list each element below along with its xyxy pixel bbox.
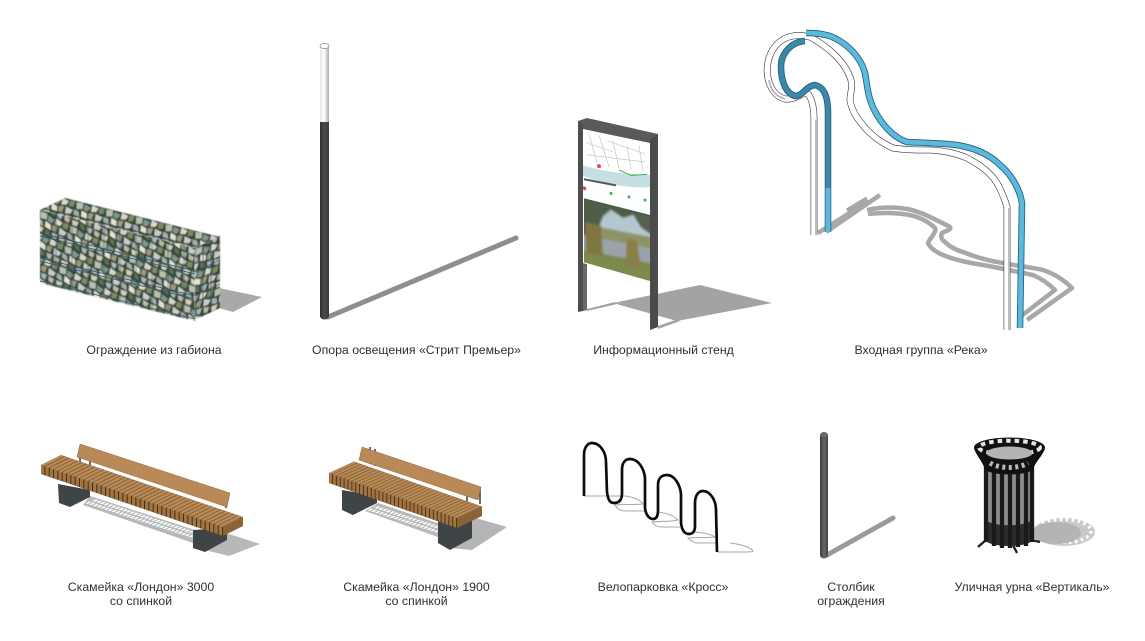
caption: Vertical street bin: Уличная урна «Вертикаль» [955, 580, 1110, 594]
icon: London bench 1900 [329, 447, 507, 550]
shadow of the arch [818, 195, 1072, 320]
icon: fence bollard [820, 432, 893, 559]
icon: Cross bike rack [584, 443, 753, 552]
caption: London bench 1900: со спинкой [385, 594, 448, 608]
caption: river entrance arch: Входная группа «Река» [854, 343, 988, 357]
caption: fence bollard: Столбик [827, 580, 875, 594]
caption: London bench 1900: Скамейка «Лондон» 1900 [343, 580, 490, 594]
caption: information stand: Информационный стенд [593, 343, 734, 357]
caption: London bench 3000: Скамейка «Лондон» 3000 [68, 580, 214, 594]
icon: London bench 3000 [41, 444, 260, 556]
caption: London bench 3000: со спинкой [110, 594, 172, 608]
icon: river entrance arch [767, 33, 1072, 330]
white rib [767, 36, 1007, 330]
icon: gabion fence [40, 198, 262, 321]
blue rib [806, 33, 1022, 328]
icon: information stand [578, 118, 772, 330]
caption: street light pole: Опора освещения «Стрит Премьер» [312, 343, 521, 357]
caption: Cross bike rack: Велопарковка «Кросс» [598, 580, 729, 594]
caption: gabion fence: Ограждение из габиона [86, 343, 222, 357]
caption: fence bollard: ограждения [817, 594, 885, 608]
icon: Vertical street bin [974, 438, 1095, 553]
icon: street light pole [320, 44, 516, 320]
